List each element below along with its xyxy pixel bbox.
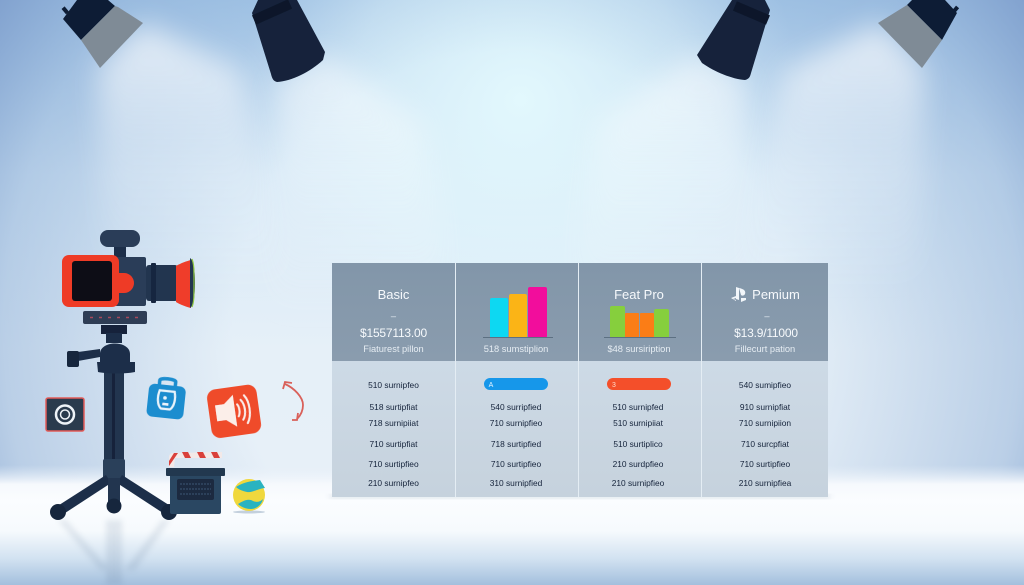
column: Premium: 910 surnipfiat <box>740 402 791 412</box>
column: Premium: 710 surtipfieo <box>740 459 790 469</box>
pricing table <box>330 263 830 498</box>
camera screen <box>62 255 134 307</box>
column: Premium: $13.9/11000 <box>734 326 798 340</box>
column: Basic: 210 surnipfeo <box>368 478 419 488</box>
column: Basic: 518 surtipfiat <box>370 402 418 412</box>
column: Premium <box>731 287 800 488</box>
icon: record square <box>46 398 84 431</box>
icon: speaker <box>206 384 262 439</box>
column: Basic: 718 surnipiiat <box>369 418 419 428</box>
column: bar chart: 310 surnipfied <box>490 478 543 488</box>
spotlight: centre left <box>252 0 325 82</box>
camera plate <box>83 311 147 324</box>
ball <box>233 479 265 514</box>
icon: premium logo <box>731 287 746 302</box>
column dividers <box>456 263 702 497</box>
column: Premium: – <box>764 311 770 321</box>
column: Feat Pro: 210 surnipfieo <box>612 478 665 488</box>
column: bar chart: 710 surtipfieo <box>491 459 541 469</box>
column: Feat Pro <box>604 287 676 488</box>
column: Premium: Fillecurt pation <box>735 344 795 354</box>
arrow: rotate <box>283 382 303 420</box>
camera body <box>115 257 146 306</box>
column: Basic: 710 surtipfiat <box>370 439 418 449</box>
column: bar chart: 710 surnipfieo <box>490 418 543 428</box>
column: Feat Pro: 210 surdpfieo <box>613 459 664 469</box>
column: Premium: 540 sumipfieo <box>739 380 791 390</box>
tripod <box>50 365 177 520</box>
column: Premium: 210 surnipfiea <box>739 478 792 488</box>
column: bar chart: 518 sumstiplion <box>484 344 548 354</box>
orange pill <box>607 378 671 390</box>
camera microphone <box>100 230 140 257</box>
blue pill: A <box>489 382 494 389</box>
column: Premium: 710 surnipiion <box>739 418 791 428</box>
column: bar chart: 718 surtipfied <box>491 439 541 449</box>
bar chart: green and orange <box>604 306 676 338</box>
column: Basic: Basic <box>378 287 410 302</box>
blue pill <box>484 378 548 390</box>
bar chart: coloured bars <box>483 287 553 338</box>
clapperboard <box>166 452 225 514</box>
spotlight: centre right <box>697 0 770 80</box>
column: bar chart: 540 surripfied <box>491 402 542 412</box>
spotlight: far left <box>62 0 143 68</box>
column: Premium: Pemium <box>752 287 800 302</box>
column: bar chart <box>483 287 553 488</box>
column: Basic: $1557113.00 <box>360 326 428 340</box>
camera on tripod <box>50 230 195 520</box>
table shadow <box>330 495 830 498</box>
icon: blue bag <box>146 377 187 420</box>
camera lens <box>146 258 195 308</box>
spotlight: far right <box>878 0 959 68</box>
tripod head <box>67 325 135 374</box>
column: Basic: – <box>391 311 397 321</box>
column: Premium: 710 surcpfiat <box>741 439 790 449</box>
column: Basic: Fiaturest pillon <box>363 344 424 354</box>
light beams <box>98 24 924 320</box>
studio floor <box>0 465 1024 585</box>
column: Feat Pro: 510 surnipfed <box>613 402 664 412</box>
table body band <box>332 361 828 497</box>
column: Basic: 510 surnipfeo <box>368 380 419 390</box>
tripod reflection <box>58 520 170 585</box>
column: Feat Pro: 510 surnipiiat <box>613 418 664 428</box>
column: Feat Pro: 510 surtiplico <box>613 439 663 449</box>
column: Feat Pro: $48 sursiription <box>607 344 671 354</box>
column: Basic <box>360 287 428 488</box>
orange pill: 3 <box>612 382 616 389</box>
column: Basic: 710 surtipfieo <box>368 459 419 469</box>
table header band <box>332 263 828 361</box>
column: Feat Pro: Feat Pro <box>614 287 664 302</box>
